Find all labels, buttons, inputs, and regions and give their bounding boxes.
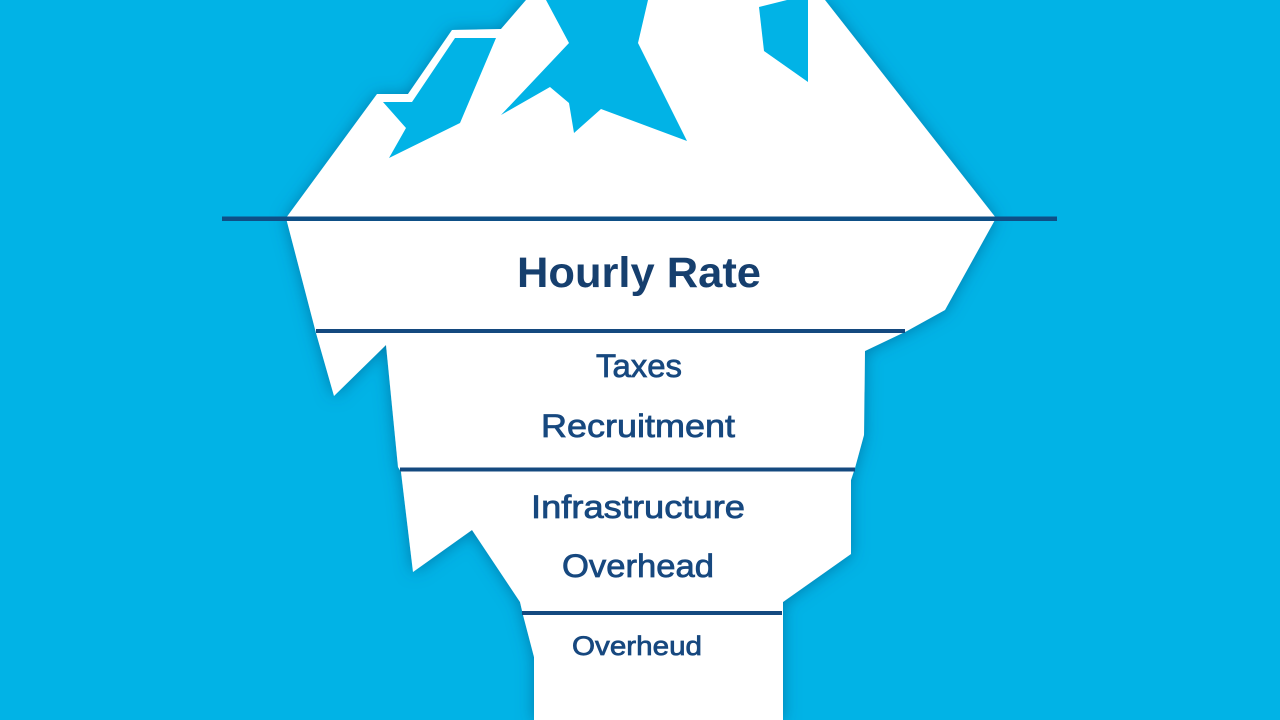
ice notch: left — [383, 38, 496, 158]
label: Overhead: Overhead — [562, 548, 714, 584]
label: Taxes: Taxes — [596, 348, 682, 384]
tier divider 2 — [400, 468, 855, 472]
label: Infrastructure: Infrastructure — [531, 489, 745, 525]
tier divider 3 — [522, 611, 782, 615]
iceberg silhouette — [286, 0, 996, 720]
ice notch: right — [759, 0, 808, 82]
label: Recruitment: Recruitment — [541, 408, 735, 444]
ice notch: centre star — [501, 0, 687, 141]
waterline — [222, 216, 1057, 221]
heading: Hourly Rate: Hourly Rate — [517, 249, 761, 297]
tier divider 1 — [316, 329, 905, 333]
label: Overheud: Overheud — [572, 631, 702, 661]
